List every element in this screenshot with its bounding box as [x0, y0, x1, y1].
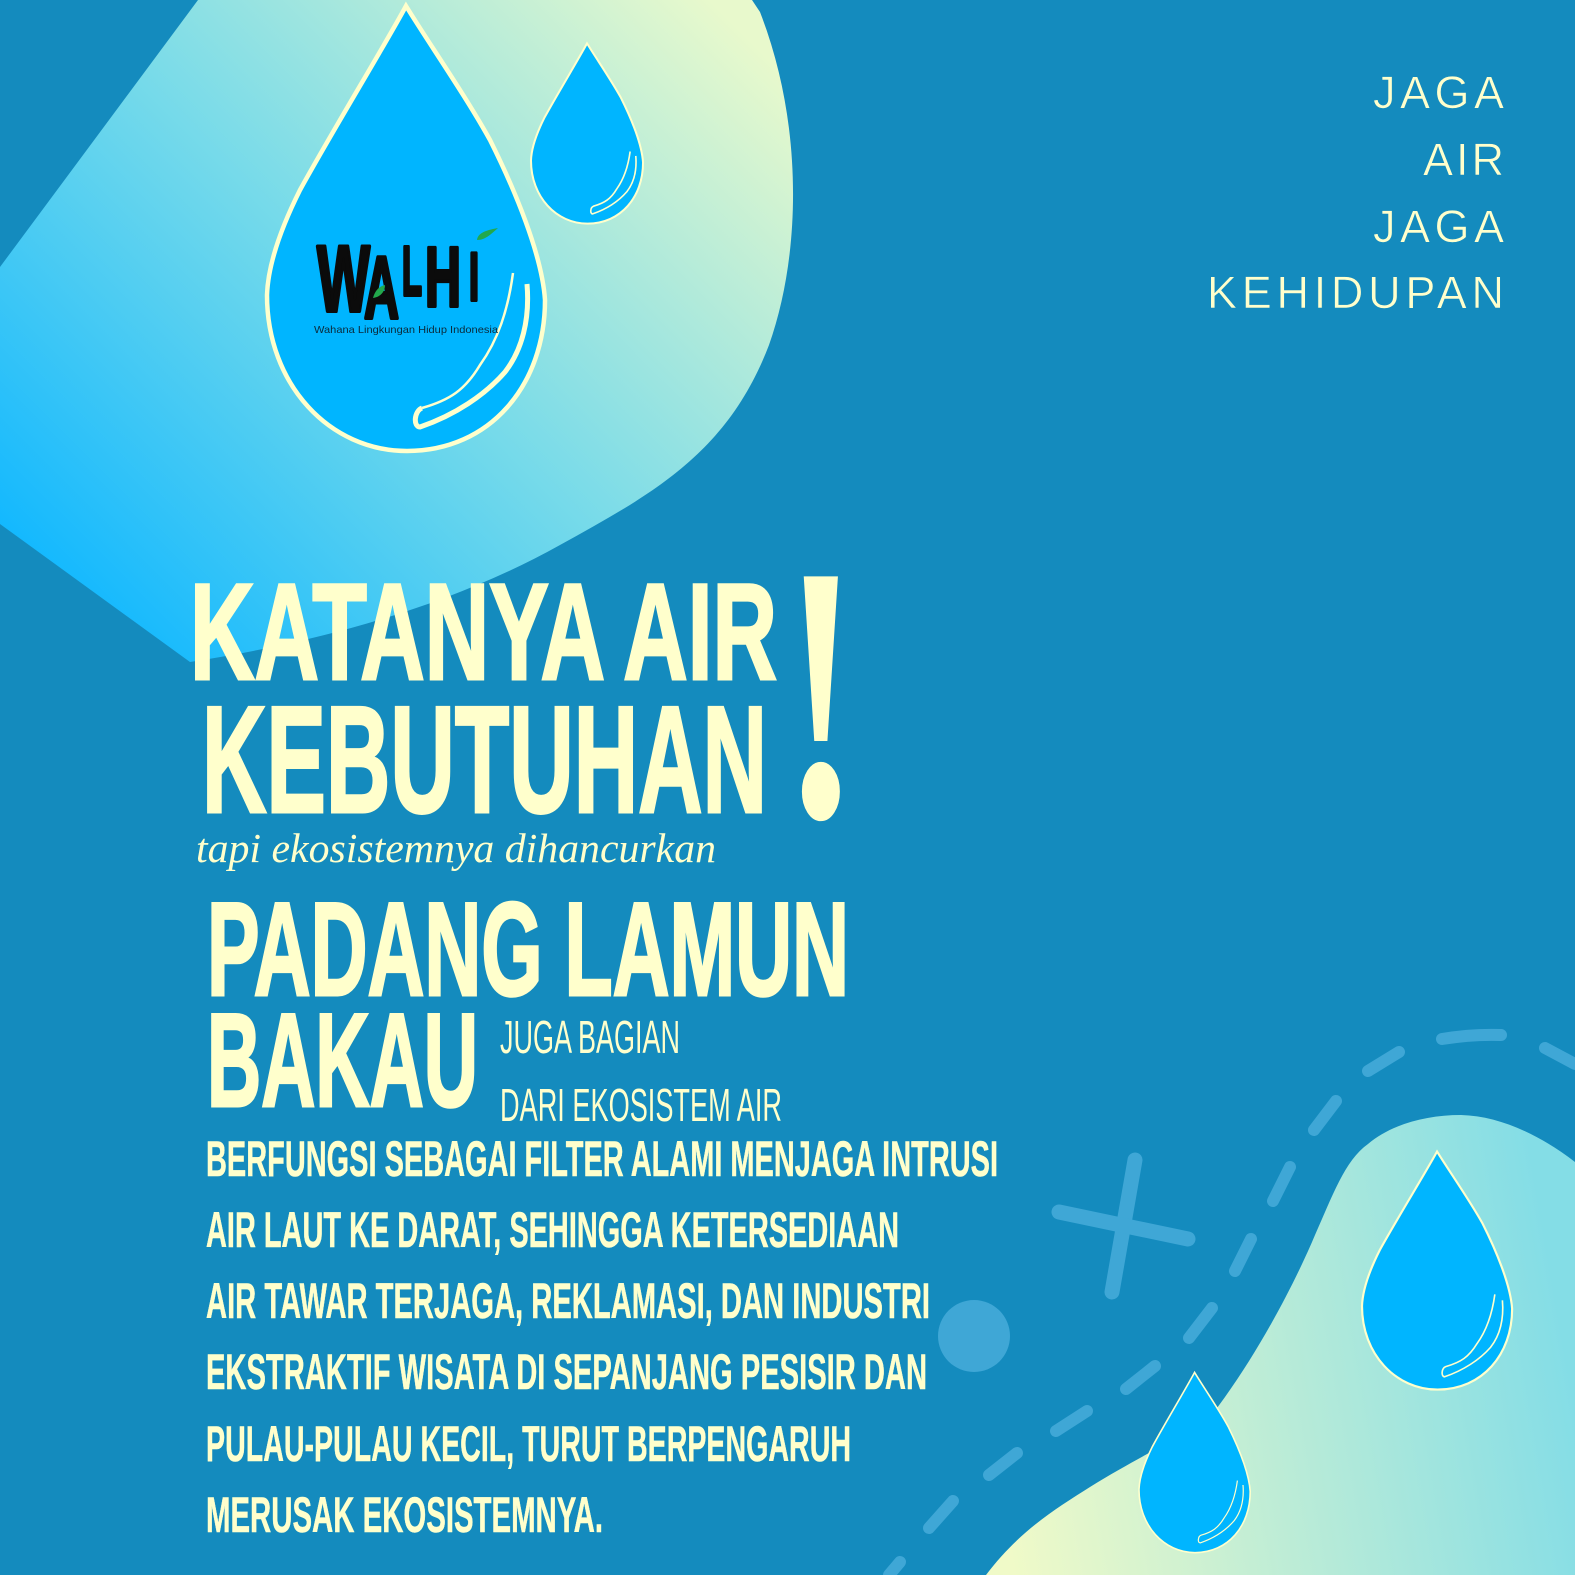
headline [190, 556, 777, 845]
padang lamun bakau heading: PADANG LAMUN [207, 876, 849, 1024]
body text: AIR TAWAR TERJAGA, REKLAMASI, DAN INDUSTRI [206, 1273, 930, 1329]
padang lamun bakau heading [207, 876, 849, 1135]
tagline top right: JAGA [1373, 67, 1504, 118]
drop highlight outer [415, 284, 528, 427]
exclamation mark: ! [782, 491, 860, 896]
drop lower centre [1139, 1372, 1250, 1553]
logo leaf [477, 228, 498, 240]
big water drop with logo [267, 6, 545, 451]
logo wordmark: A [364, 238, 399, 337]
logo wordmark: H [425, 230, 461, 324]
side note [500, 1011, 782, 1131]
side note: DARI EKOSISTEM AIR [500, 1079, 782, 1131]
body text: MERUSAK EKOSISTEMNYA. [206, 1487, 603, 1543]
logo wordmark: W [317, 226, 370, 331]
drop body [267, 6, 545, 451]
drop highlight inner [422, 273, 513, 408]
logo leaf centre [373, 285, 385, 298]
bottom-right gradient blob [986, 1115, 1575, 1575]
dashed route [889, 1035, 1575, 1575]
subheading: tapi ekosistemnya dihancurkan [196, 825, 716, 871]
tagline top right: AIR [1423, 134, 1504, 185]
icon: cross [1059, 1160, 1188, 1292]
headline: KATANYA AIR [190, 556, 777, 709]
logo tagline: Wahana Lingkungan Hidup Indonesia [314, 324, 498, 336]
drop lower right [1362, 1152, 1512, 1390]
tagline top right [1207, 67, 1504, 318]
side note: JUGA BAGIAN [500, 1011, 680, 1063]
body text: BERFUNGSI SEBAGAI FILTER ALAMI MENJAGA INTRUSI [206, 1131, 998, 1187]
tagline top right: KEHIDUPAN [1207, 267, 1504, 318]
top-left gradient blob [0, 0, 793, 662]
tagline top right: JAGA [1373, 201, 1504, 252]
icon: circle [938, 1300, 1010, 1372]
body text: EKSTRAKTIF WISATA DI SEPANJANG PESISIR DAN [206, 1344, 927, 1400]
small drop top [531, 43, 643, 224]
logo wordmark: L [402, 232, 422, 310]
padang lamun bakau heading: BAKAU [207, 987, 478, 1135]
headline: KEBUTUHAN [202, 675, 767, 845]
body text [206, 1131, 998, 1543]
body text: AIR LAUT KE DARAT, SEHINGGA KETERSEDIAAN [206, 1202, 899, 1258]
body text: PULAU-PULAU KECIL, TURUT BERPENGARUH [206, 1416, 851, 1472]
logo wordmark: I [469, 239, 479, 315]
